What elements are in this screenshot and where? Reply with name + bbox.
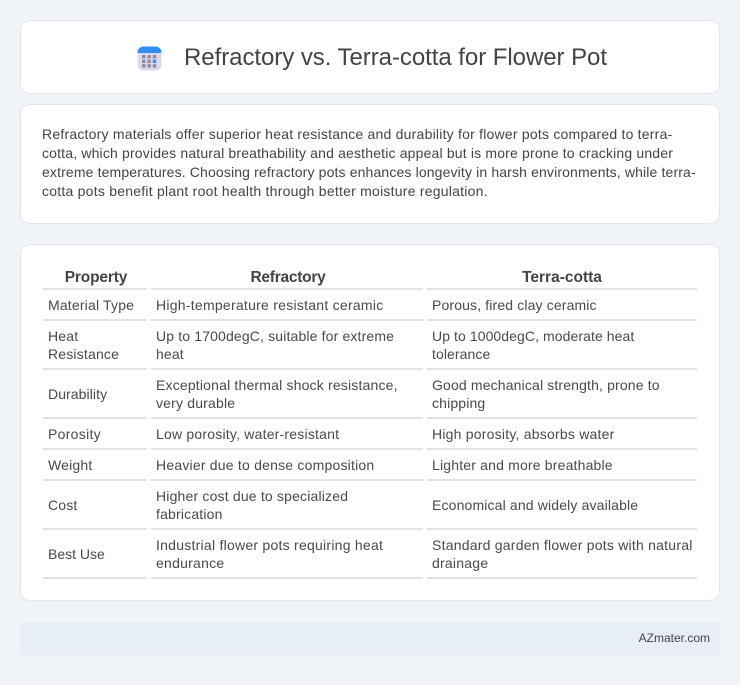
comparison table: Good mechanical strength, prone to — [432, 377, 660, 393]
footer credit: AZmater.com — [639, 631, 710, 645]
comparison table: fabrication — [156, 506, 223, 522]
footer bar — [20, 622, 720, 655]
comparison table: Material Type — [48, 297, 134, 313]
intro text: Refractory materials offer superior heat resistance and durability for flower pots compared to terra- — [42, 126, 672, 142]
comparison table — [43, 269, 697, 579]
intro text: cotta, which provides natural breathability and aesthetic appeal but is more prone to cracking under — [42, 145, 673, 161]
comparison table: Industrial flower pots requiring heat — [156, 537, 383, 553]
comparison table: Lighter and more breathable — [432, 457, 613, 473]
comparison table panel — [20, 244, 720, 601]
intro panel — [20, 104, 720, 224]
header panel — [20, 20, 720, 94]
comparison table: chipping — [432, 395, 485, 411]
intro text — [42, 126, 696, 199]
comparison table: Heat — [48, 328, 78, 344]
intro text: extreme temperatures. Choosing refractory pots enhances longevity in harsh environments, while terra- — [42, 164, 696, 180]
comparison table: Refractory — [250, 269, 326, 286]
comparison table: Heavier due to dense composition — [156, 457, 374, 473]
comparison table: High porosity, absorbs water — [432, 426, 615, 442]
comparison table: Up to 1700degC, suitable for extreme — [156, 328, 394, 344]
comparison table: Low porosity, water-resistant — [156, 426, 339, 442]
comparison table: Up to 1000degC, moderate heat — [432, 328, 634, 344]
comparison table: tolerance — [432, 346, 490, 362]
comparison table: Best Use — [48, 546, 105, 562]
comparison table: Higher cost due to specialized — [156, 488, 348, 504]
title: Refractory vs. Terra-cotta for Flower Pot — [184, 44, 607, 71]
comparison table: Durability — [48, 386, 107, 402]
intro text: cotta pots benefit plant root health through better moisture regulation. — [42, 183, 488, 199]
comparison table: Economical and widely available — [432, 497, 638, 513]
comparison table: Porous, fired clay ceramic — [432, 297, 597, 313]
comparison table: Weight — [48, 457, 92, 473]
comparison table: Resistance — [48, 346, 119, 362]
comparison table: Exceptional thermal shock resistance, — [156, 377, 398, 393]
comparison table: heat — [156, 346, 184, 362]
comparison table: endurance — [156, 555, 224, 571]
comparison table: Terra-cotta — [522, 269, 602, 286]
comparison table: very durable — [156, 395, 235, 411]
comparison table: High-temperature resistant ceramic — [156, 297, 383, 313]
icon: calendar — [138, 46, 162, 70]
comparison table: Porosity — [48, 426, 101, 442]
comparison table: Cost — [48, 497, 78, 513]
comparison table: Standard garden flower pots with natural — [432, 537, 693, 553]
comparison table: Property — [65, 269, 127, 286]
comparison table: drainage — [432, 555, 488, 571]
